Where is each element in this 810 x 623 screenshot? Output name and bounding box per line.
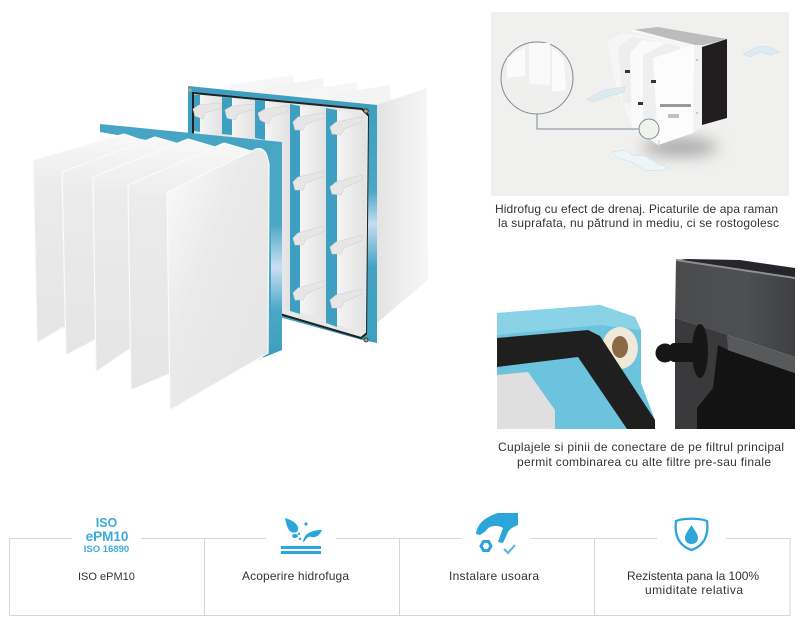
- plastic stays: [193, 103, 362, 308]
- icon: easy installation: [476, 513, 518, 553]
- caption: water-repellent: Hidrofug cu efect de drenaj. Picaturile de apa raman: [495, 202, 778, 216]
- label: humidity resistance: [627, 569, 759, 597]
- blue vertical bars: [194, 95, 337, 327]
- connecting pin: [656, 324, 708, 378]
- frame highlight: [367, 105, 377, 343]
- panel background: [491, 12, 789, 196]
- feature table: [10, 513, 790, 616]
- icon: ISO ePM10: ISO 16890: [84, 544, 129, 555]
- icon: ISO ePM10: ISO: [96, 516, 118, 530]
- product photo: pocket filter pair: [33, 75, 428, 410]
- label: humidity resistance: umiditate relativa: [645, 583, 743, 597]
- label: easy installation: Instalare usoara: [449, 569, 539, 583]
- caption: water-repellent: la suprafata, nu pătrund in mediu, ci se rostogolesc: [498, 216, 779, 230]
- label: water repellent coating: Acoperire hidrofuga: [242, 569, 349, 583]
- label: humidity resistance: Rezistenta pana la 100%: [627, 569, 759, 583]
- photo panel: water-repellent filter: [491, 12, 789, 196]
- floor shadow: [642, 139, 718, 155]
- caption: coupling: [498, 440, 784, 469]
- caption: coupling: Cuplajele si pinii de conectare de pe filtrul principal: [498, 440, 784, 454]
- white bushing: [602, 327, 638, 369]
- caption: coupling: permit combinarea cu alte filtre pre-sau finale: [517, 455, 771, 469]
- rear filter bags: [230, 75, 428, 323]
- filter illustration: [607, 27, 727, 150]
- table grid: [10, 538, 790, 616]
- front frame: [100, 124, 282, 358]
- interior cells: [200, 95, 366, 332]
- rear frame: [188, 86, 377, 343]
- icon gaps: [72, 530, 726, 546]
- photo panel: coupling detail: [497, 259, 795, 429]
- icon: ISO ePM10: ePM10: [86, 529, 128, 544]
- icon: water repellent coating: [281, 518, 322, 554]
- icon: humidity shield: [676, 519, 707, 550]
- label: ISO ePM10: ISO ePM10: [78, 571, 135, 583]
- icon: ISO ePM10: [84, 516, 129, 555]
- blue frame corner: [497, 305, 655, 429]
- caption: water-repellent: [495, 202, 779, 230]
- water splashes: [587, 46, 780, 171]
- foam gasket: [497, 330, 655, 429]
- dark filter frame: [675, 259, 795, 429]
- magnifier callout: [501, 42, 659, 139]
- front filter bags: [33, 134, 269, 410]
